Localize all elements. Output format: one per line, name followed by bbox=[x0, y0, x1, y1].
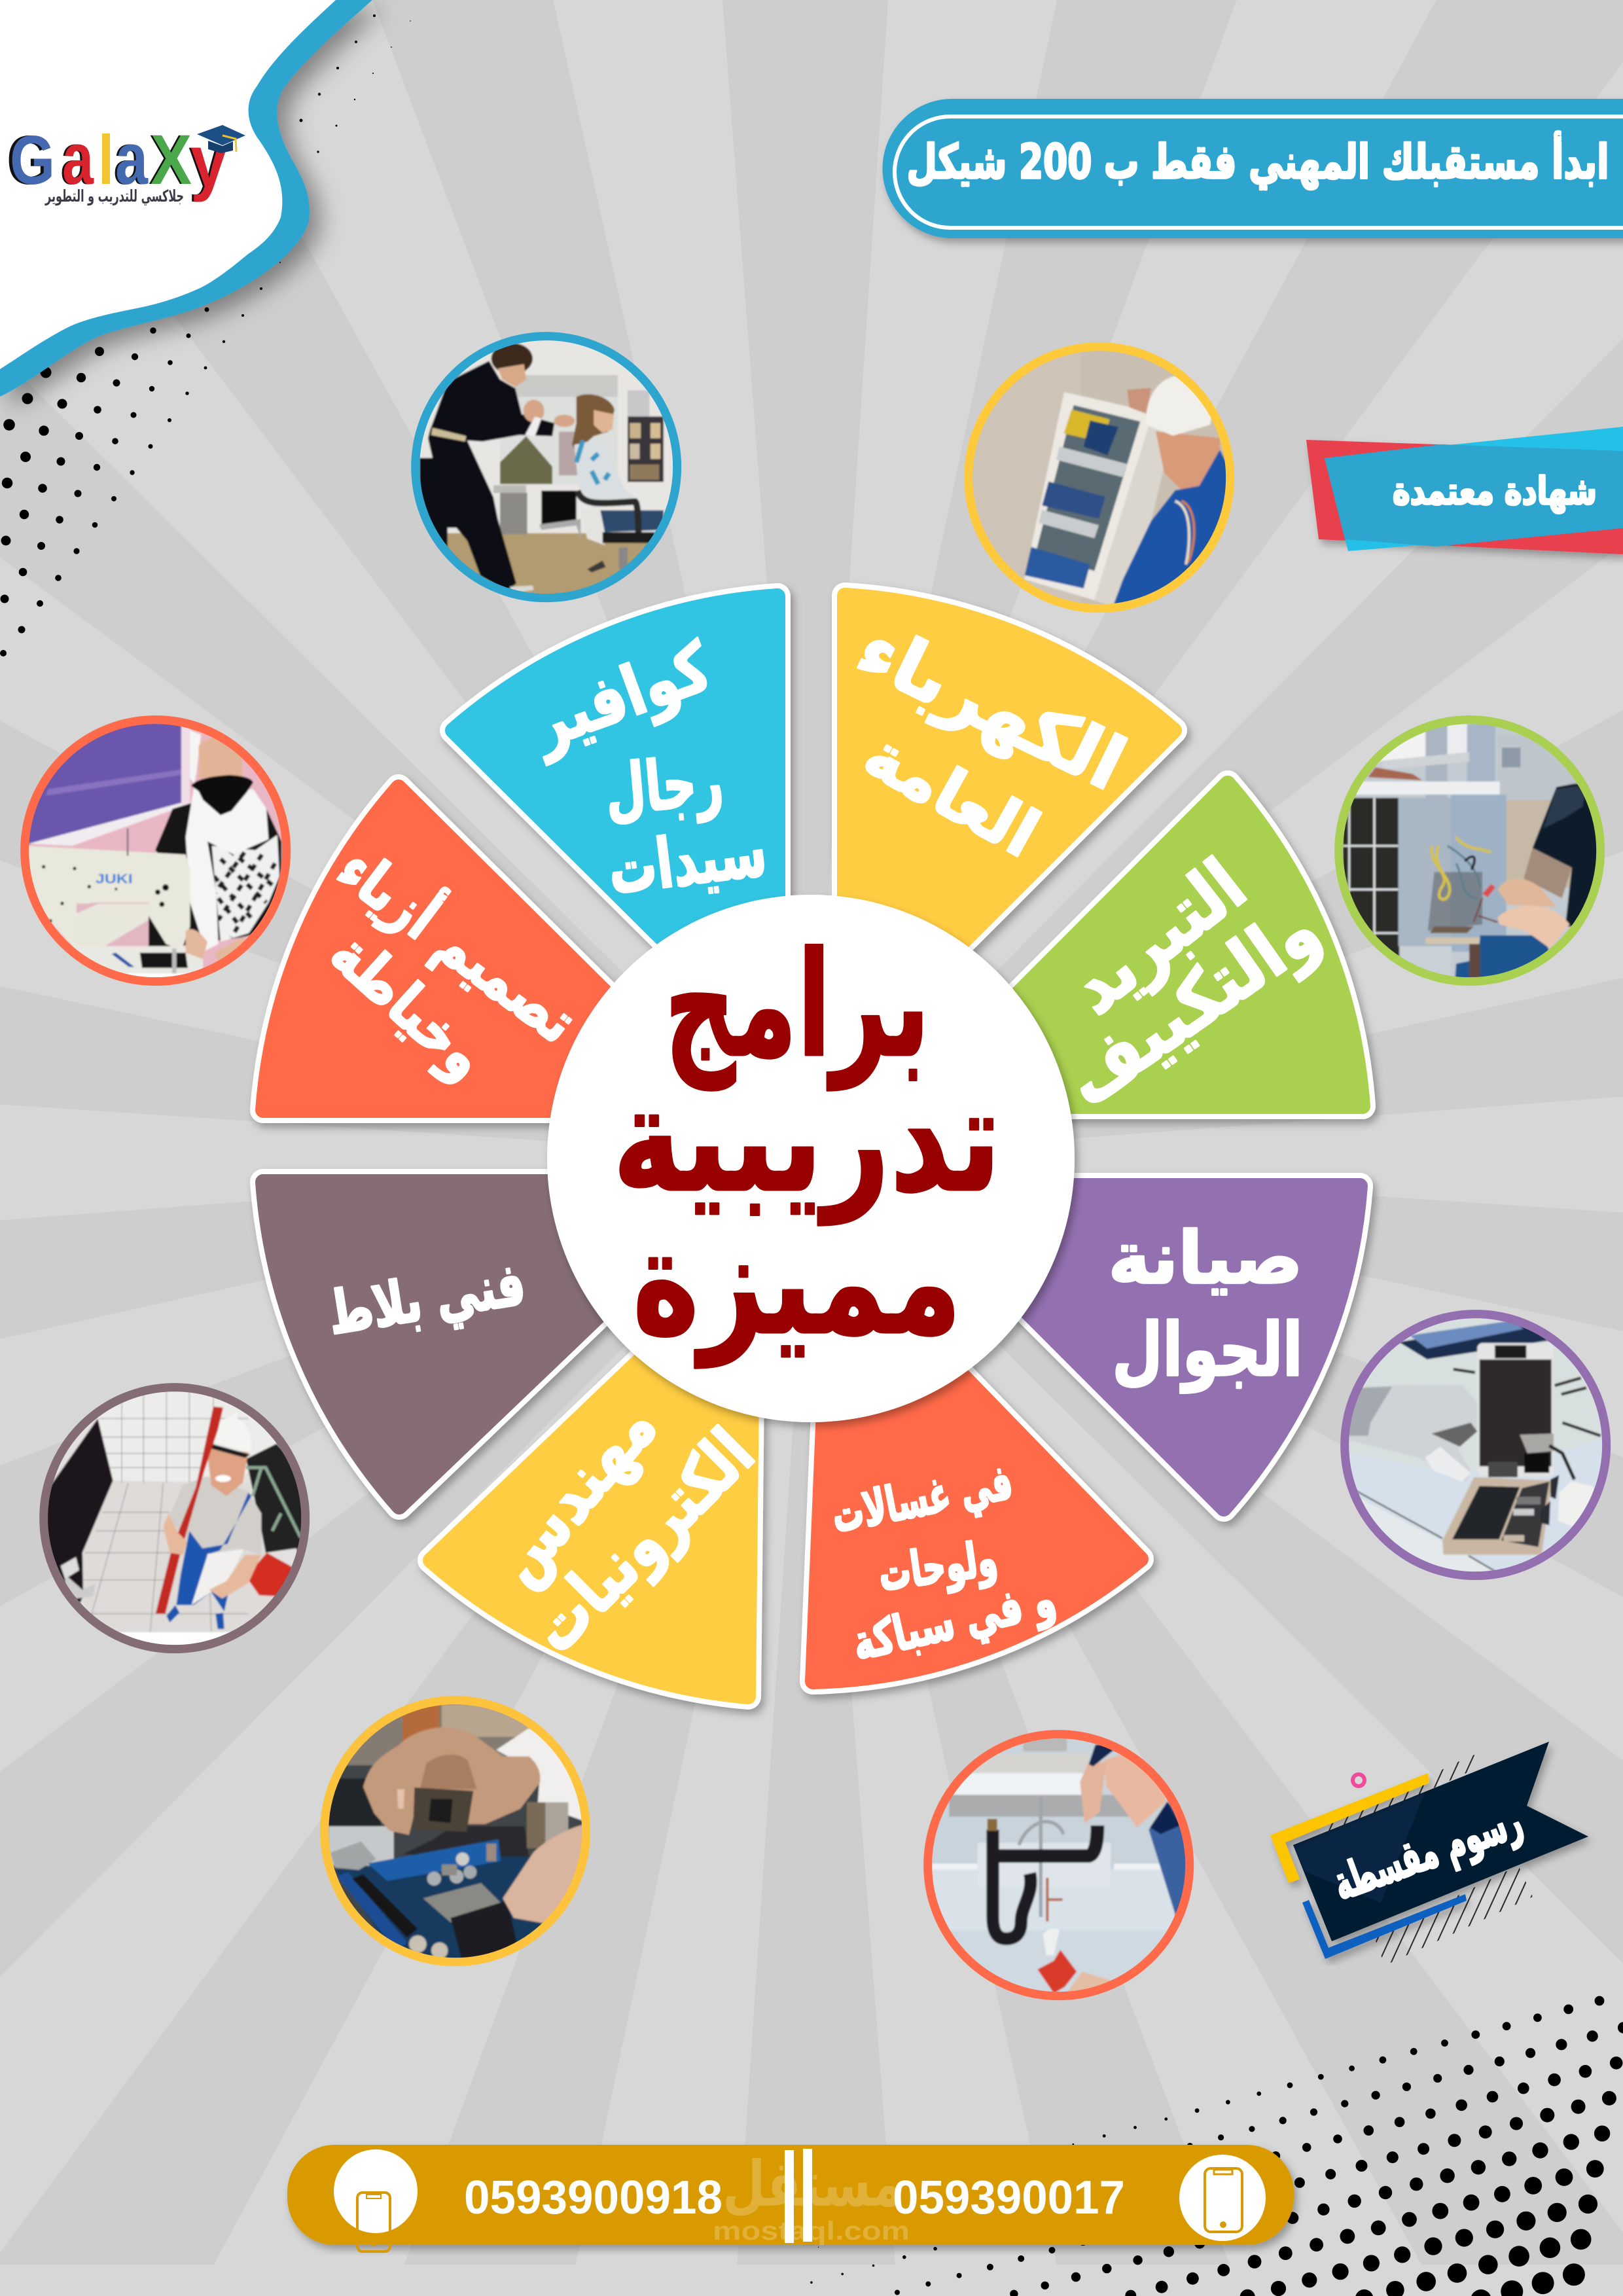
watermark: mostaql.com bbox=[713, 2217, 910, 2246]
label: phone: الجوال bbox=[1113, 1308, 1302, 1393]
center circle with title bbox=[547, 895, 1075, 1422]
label: general electricity: الكهرباء bbox=[845, 606, 1138, 807]
wheel of eight training segments bbox=[263, 596, 1363, 1696]
segment: washing machines, boards and plumbing bbox=[813, 1355, 1141, 1681]
logo: Galaxy: جلاكسي للتدريب و التطوير bbox=[45, 187, 184, 206]
label: general: العامة bbox=[852, 715, 1052, 872]
label: refrigeration: التبريد bbox=[1054, 843, 1262, 1031]
halftone dots bottom right bbox=[812, 1992, 1623, 2296]
top price banner bbox=[882, 99, 1623, 238]
label: women: سيدات bbox=[604, 812, 771, 910]
label: tailoring: وخياطة bbox=[317, 918, 500, 1094]
icon: right phone bbox=[1179, 2155, 1266, 2241]
label: maintenance: صيانة bbox=[1109, 1216, 1302, 1300]
photo circle: phone repair bbox=[1340, 1310, 1611, 1580]
label: hairdresser: كوافير bbox=[519, 626, 721, 765]
photo circle: air conditioning technician bbox=[1334, 715, 1605, 986]
label: air conditioning: والتكييف bbox=[1049, 887, 1336, 1123]
contact bar bbox=[287, 2145, 1294, 2251]
photo circle: electrician bbox=[964, 342, 1234, 613]
phone number left: 0593900918 bbox=[464, 2172, 722, 2224]
logo: Galaxy: a bbox=[62, 118, 94, 200]
center circle with title: برامج bbox=[664, 921, 930, 1090]
logo: Galaxy: a bbox=[115, 118, 149, 200]
label: washing machines: في غسالات bbox=[827, 1454, 1017, 1544]
segment: refrigeration and air conditioning bbox=[982, 783, 1363, 1106]
label: plumbing: و في سباكة bbox=[847, 1571, 1061, 1672]
logo: Galaxy: X bbox=[151, 120, 192, 199]
label: boards: ولوحات bbox=[875, 1530, 1001, 1603]
segment: tiling bbox=[263, 1182, 622, 1507]
segment: general electricity bbox=[845, 596, 1174, 982]
center circle with title: تدريبية bbox=[613, 1056, 1001, 1225]
center circle with title: مميزة bbox=[632, 1198, 962, 1368]
label: tiler: فني بلاط bbox=[323, 1249, 529, 1348]
segment: phone maintenance bbox=[982, 1186, 1360, 1509]
segment labels bbox=[317, 606, 1336, 1672]
watermark: مستقل bbox=[722, 2147, 903, 2221]
icon: left phone bbox=[334, 2149, 418, 2251]
certified badge bbox=[1306, 427, 1623, 554]
halftone dots top left bbox=[0, 14, 411, 656]
label: fashion design: تصميم أزياء bbox=[325, 830, 593, 1058]
label: men: رجال bbox=[602, 740, 726, 831]
photo circle: plumber bbox=[923, 1730, 1194, 2000]
photo circle: sewing: JUKI bbox=[96, 872, 133, 887]
photo circle: tiler bbox=[39, 1383, 310, 1653]
top-left white swoosh with blue edge bbox=[0, 0, 372, 397]
photo circle: electronics bbox=[320, 1696, 590, 1966]
logo: Galaxy bbox=[10, 118, 245, 206]
installment ribbon bbox=[1270, 1742, 1588, 1965]
segment: hairdressing bbox=[453, 596, 777, 982]
logo: Galaxy: G bbox=[10, 122, 55, 199]
separator bbox=[785, 2149, 812, 2243]
photo circle: sewing bbox=[20, 715, 291, 986]
segment: electronics engineer bbox=[431, 1348, 751, 1696]
segment: fashion design and tailoring bbox=[263, 787, 622, 1110]
logo: Galaxy: y bbox=[190, 120, 227, 202]
watermark bbox=[713, 2147, 910, 2246]
phone number right: 059390017 bbox=[893, 2172, 1125, 2224]
label: electronics: الكترونيات bbox=[514, 1413, 770, 1668]
label: engineer: مهندس bbox=[476, 1387, 672, 1599]
photo circle: hairdresser bbox=[411, 332, 682, 602]
